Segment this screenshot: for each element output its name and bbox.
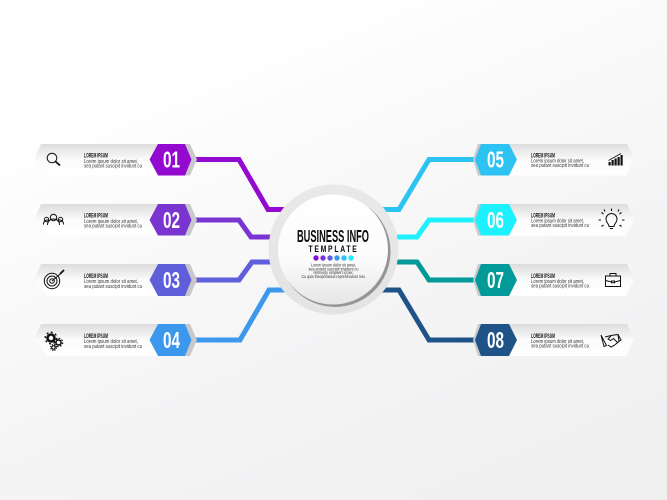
number: 03 bbox=[163, 267, 180, 293]
description: Lorem ipsum dolor sit amet, bbox=[84, 279, 138, 285]
icon: target bbox=[44, 270, 64, 289]
description: Lorem ipsum dolor sit amet, bbox=[531, 158, 584, 164]
connector 04 bbox=[190, 290, 286, 340]
description: sea putant suscipit invidunt cu bbox=[84, 224, 142, 230]
number: 07 bbox=[487, 267, 504, 293]
connector lines bbox=[190, 160, 477, 340]
hexagon bbox=[475, 324, 517, 356]
icon: gears bbox=[45, 332, 63, 350]
banner bbox=[34, 144, 190, 176]
banner bbox=[478, 144, 634, 176]
outer ring bbox=[268, 184, 398, 314]
description bbox=[531, 218, 589, 229]
disc shadow bbox=[280, 196, 390, 307]
label: LOREM IPSUM bbox=[84, 334, 108, 340]
subtitle: TEMPLATE bbox=[308, 244, 359, 254]
description bbox=[84, 339, 142, 350]
center body text: Cu quis theophrastus reprehendunt mei. bbox=[302, 274, 366, 279]
hexagon bbox=[475, 144, 517, 176]
description: Lorem ipsum dolor sit amet, bbox=[84, 159, 138, 165]
center circle bbox=[268, 184, 398, 314]
icon: handshake bbox=[601, 334, 621, 347]
hexagon shadow bbox=[473, 144, 482, 176]
hexagon bbox=[475, 264, 517, 296]
label: LOREM IPSUM bbox=[531, 154, 555, 160]
connector 01 bbox=[190, 160, 286, 210]
description bbox=[84, 219, 142, 230]
icon: team bbox=[44, 214, 64, 225]
connector 02 bbox=[190, 220, 272, 237]
color dots bbox=[313, 255, 354, 261]
hexagon shadow bbox=[473, 324, 482, 356]
label: LOREM IPSUM bbox=[84, 274, 108, 280]
hexagon bbox=[150, 204, 192, 236]
description bbox=[531, 158, 589, 169]
number: 02 bbox=[163, 207, 180, 233]
icon: light bulb bbox=[598, 208, 624, 228]
connector 05 bbox=[382, 160, 477, 210]
item 05 bbox=[473, 144, 634, 176]
description: sea putant suscipit invidunt cu bbox=[531, 344, 589, 350]
description: sea putant suscipit invidunt cu bbox=[84, 344, 142, 350]
connector 06 bbox=[397, 220, 477, 237]
icon: magnifier bbox=[47, 153, 60, 166]
hexagon bbox=[150, 264, 192, 296]
description: Lorem ipsum dolor sit amet, bbox=[84, 339, 138, 345]
hexagon shadow bbox=[185, 144, 197, 176]
item 06 bbox=[473, 204, 634, 236]
item 02 bbox=[34, 204, 197, 236]
number: 04 bbox=[163, 327, 180, 353]
hexagon bbox=[475, 204, 517, 236]
icon: briefcase bbox=[606, 274, 620, 286]
description: Lorem ipsum dolor sit amet, bbox=[531, 279, 584, 285]
banner bbox=[478, 264, 634, 296]
white disc bbox=[278, 194, 388, 304]
description: sea putant suscipit invidunt cu bbox=[531, 223, 589, 229]
item 04 bbox=[34, 324, 197, 356]
description: Lorem ipsum dolor sit amet, bbox=[531, 339, 584, 345]
hexagon shadow bbox=[473, 264, 482, 296]
banner bbox=[34, 324, 190, 356]
hexagon shadow bbox=[185, 324, 197, 356]
banner bbox=[34, 264, 190, 296]
description: sea putant suscipit invidunt cu bbox=[84, 284, 142, 290]
number: 01 bbox=[163, 146, 180, 172]
title: BUSINESS INFO bbox=[297, 226, 369, 246]
icon: signal bars bbox=[608, 154, 623, 166]
description bbox=[531, 279, 589, 290]
number: 06 bbox=[487, 207, 504, 233]
hexagon bbox=[150, 324, 192, 356]
center body text: sea putant suscipit invidunt cu bbox=[308, 266, 359, 271]
hexagon shadow bbox=[185, 204, 197, 236]
label: LOREM IPSUM bbox=[531, 334, 555, 340]
description: Lorem ipsum dolor sit amet, bbox=[84, 219, 138, 225]
center body text: Homunty simpsert id per. bbox=[314, 270, 354, 275]
connector 03 bbox=[190, 262, 272, 280]
center body text bbox=[302, 262, 366, 279]
label: LOREM IPSUM bbox=[531, 214, 555, 220]
number: 05 bbox=[487, 146, 504, 172]
item 01 bbox=[34, 144, 197, 176]
description: Lorem ipsum dolor sit amet, bbox=[531, 218, 584, 224]
number: 08 bbox=[487, 327, 504, 353]
description: sea putant suscipit invidunt cu bbox=[531, 163, 589, 169]
center body text: Lorem ipsum dolor sit amet, bbox=[311, 262, 356, 268]
label: LOREM IPSUM bbox=[84, 154, 108, 160]
connector 08 bbox=[382, 290, 477, 340]
banner bbox=[478, 324, 634, 356]
item 07 bbox=[473, 264, 634, 296]
connector 07 bbox=[397, 262, 477, 280]
description bbox=[531, 339, 589, 350]
banner bbox=[478, 204, 634, 236]
description: sea putant suscipit invidunt cu bbox=[531, 284, 589, 290]
description bbox=[84, 159, 142, 170]
label: LOREM IPSUM bbox=[531, 274, 555, 280]
item 03 bbox=[34, 264, 197, 296]
hexagon bbox=[150, 144, 192, 176]
banner bbox=[34, 204, 190, 236]
label: LOREM IPSUM bbox=[84, 214, 108, 220]
item 08 bbox=[473, 324, 634, 356]
description bbox=[84, 279, 142, 290]
hexagon shadow bbox=[473, 204, 482, 236]
hexagon shadow bbox=[185, 264, 197, 296]
description: sea putant suscipit invidunt cu bbox=[84, 164, 142, 170]
